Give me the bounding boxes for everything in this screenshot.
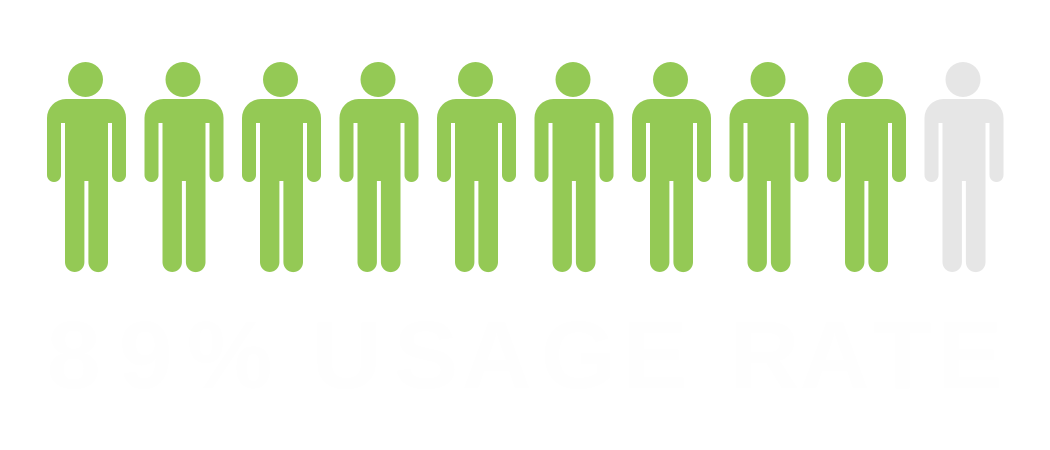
icon: person 8 (green) (730, 62, 808, 272)
icon: person 4 (green) (340, 62, 418, 272)
icon: person 5 (green) (437, 62, 516, 272)
icon: person 7 (green) (632, 62, 711, 272)
icon: person 9 (green) (827, 62, 906, 272)
icon: person 10 (grey) (924, 62, 1004, 272)
icon: person 6 (green) (534, 62, 614, 272)
icon: person 3 (green) (242, 62, 321, 272)
heading: 89% usage rate (near-white): 89% USAGE RATE (0, 302, 1002, 409)
icon: person 2 (green) (144, 62, 224, 272)
icon: person 1 (green) (47, 62, 126, 272)
pictogram row: 9 of 10 people highlighted (47, 62, 1004, 272)
